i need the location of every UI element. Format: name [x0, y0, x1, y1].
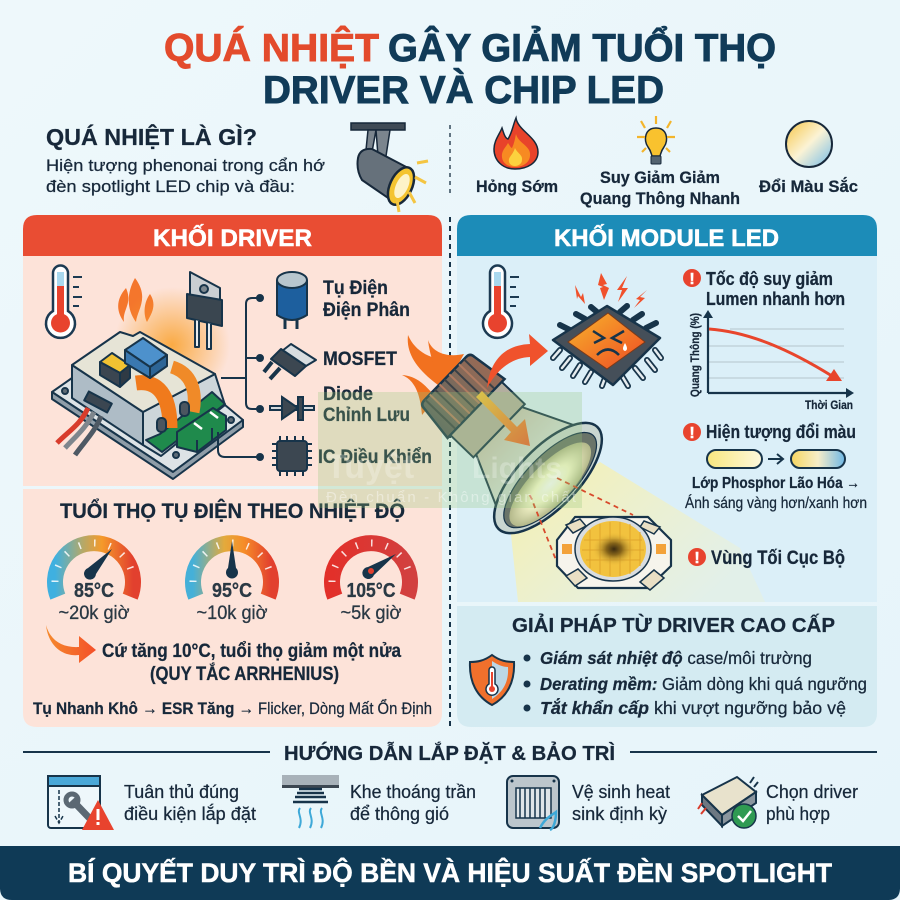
component labels: Chỉnh Lưu: [323, 405, 410, 426]
icon: installation manual: [48, 776, 114, 830]
text: lumen decline: Tốc độ suy giảm: [706, 269, 833, 289]
icon: diode: [270, 397, 314, 420]
footer banner: [0, 846, 900, 900]
watermark: Lights: [472, 452, 562, 485]
text: failure chain: [33, 699, 432, 718]
solution bullets: Derating mềm: Giảm dòng khi quá ngưỡng: [540, 674, 867, 694]
text: clean heat sink: sink định kỳ: [572, 804, 667, 824]
icon: COB LED chip with dark spot: [557, 517, 671, 590]
flames behind lamp: [402, 335, 464, 415]
text: colour shift: Lớp Phosphor Lão Hóa →: [692, 475, 860, 492]
text: lumen decline: !: [689, 271, 695, 288]
watermark: Đèn chuẩn - Không gian chất: [326, 489, 577, 506]
icon: TO-220 transistor: [187, 272, 222, 349]
LED module header: KHỐI MODULE LED: [554, 224, 779, 252]
component labels: MOSFET: [323, 349, 397, 370]
title: QUÁ NHIỆT: [164, 26, 379, 70]
gauge 85C: 85°C: [74, 580, 114, 602]
intro text: what is overheating: [46, 123, 325, 196]
gauge 95C: 95°C: [212, 580, 252, 602]
text: install conditions: điều kiện lắp đặt: [124, 803, 256, 824]
chart: lumen over time: [688, 310, 854, 412]
icon: heat sink cleaning: [507, 776, 559, 830]
gauge 105C: 105°C: [346, 580, 396, 602]
icon: colour shift circle: [786, 121, 832, 167]
text: local dark zone: Vùng Tối Cục Bộ: [711, 548, 845, 569]
text: Arrhenius rule: [102, 641, 401, 685]
icon: thermometer LED module: [483, 266, 519, 338]
arrow: rule: [46, 625, 96, 663]
icon: heat flames: [118, 278, 153, 322]
icon: track spotlight: [351, 123, 428, 212]
component labels: Diode: [323, 384, 373, 405]
label: early failure: Hỏng Sớm: [476, 177, 558, 196]
component labels: Tụ Điện: [323, 278, 388, 299]
text: ceiling ventilation: Khe thoáng trần: [350, 782, 476, 802]
heading: installation guide: HƯỚNG DẪN LẮP ĐẶT & BẢO TRÌ: [284, 741, 615, 765]
watermark: Tuyệt: [326, 448, 414, 486]
icon: ceiling vent: [282, 775, 339, 828]
title: GÂY GIẢM TUỔI THỌ: [388, 25, 776, 70]
component labels: [318, 278, 432, 468]
intro text: what is overheating: đèn spotlight LED chip và đầu:: [46, 177, 295, 196]
title: DRIVER VÀ CHIP LED: [263, 68, 664, 112]
illustration: LED spotlight: [396, 328, 619, 550]
text: install conditions: Tuân thủ đúng: [124, 782, 239, 802]
heat glow: [114, 287, 230, 403]
panel: LED module block: [457, 215, 877, 602]
gauge 95C: [193, 541, 271, 624]
connector lines: [218, 295, 263, 460]
text: Arrhenius rule: (QUY TẮC ARRHENIUS): [150, 663, 339, 685]
icon: SMD MOSFET: [264, 344, 316, 379]
text: colour shift: Ánh sáng vàng hơn/xanh hơn: [685, 495, 867, 512]
icon: shield thermometer: [470, 655, 514, 705]
text: colour shift: [683, 422, 867, 512]
icon: thermometer driver: [46, 266, 82, 338]
gauge 95C: ~10k giờ: [196, 603, 268, 624]
icon: light bulb: [637, 116, 675, 164]
driver header: KHỐI DRIVER: [153, 224, 312, 252]
label: lumen decline: Suy Giảm Giảm: [600, 168, 720, 187]
gauge 85C: ~20k giờ: [58, 603, 130, 624]
text: choose driver: Chọn driver: [766, 782, 858, 802]
text: colour shift: Hiện tượng đổi màu: [706, 422, 856, 442]
gauge 105C: [332, 543, 410, 624]
panel: driver solutions: [457, 606, 877, 727]
panel: driver block: [23, 215, 442, 486]
component labels: IC Điều Khiển: [318, 447, 432, 468]
icon: controller IC: [272, 436, 312, 476]
text: colour shift: !: [689, 425, 695, 442]
icon: stressed LED chip: [553, 306, 661, 386]
text: ceiling ventilation: [350, 782, 476, 824]
text: lumen decline: [683, 269, 845, 309]
label: lumen decline: [580, 168, 740, 208]
label: colour shift: Đổi Màu Sắc: [759, 177, 858, 196]
footer banner: BÍ QUYẾT DUY TRÌ ĐỘ BỀN VÀ HIỆU SUẤT ĐÈN SPOTLIGHT: [68, 857, 832, 888]
arrow: heat to chip: [487, 334, 548, 388]
text: lumen decline: Lumen nhanh hơn: [706, 289, 845, 309]
text: failure chain: Flicker, Dòng Mất Ổn Định: [258, 699, 432, 718]
text: install conditions: [124, 782, 256, 824]
text: choose driver: [766, 782, 858, 824]
panel: capacitor lifetime: [23, 489, 442, 727]
icon: driver with check: [698, 777, 758, 828]
text: local dark zone: !: [694, 550, 700, 567]
solution bullets: Giám sát nhiệt độ case/môi trường: [540, 648, 812, 668]
arrow: heat into lamp: [476, 391, 530, 446]
chart: lumen over time: Thời Gian: [805, 398, 853, 412]
text: Arrhenius rule: Cứ tăng 10°C, tuổi thọ giảm một nửa: [102, 641, 401, 662]
title: [164, 25, 776, 112]
light beam: [510, 462, 765, 602]
capacitor lifetime heading: TUỔI THỌ TỤ ĐIỆN THEO NHIỆT ĐỘ: [60, 499, 405, 523]
chart: lumen over time: Quang Thông (%): [688, 313, 702, 397]
illustration: driver circuit box: [52, 332, 243, 479]
solution bullets: [524, 648, 867, 718]
solutions heading: GIẢI PHÁP TỪ DRIVER CAO CẤP: [512, 613, 835, 637]
text: clean heat sink: Vệ sinh heat: [572, 782, 670, 802]
solution bullets: Tắt khẩn cấp khi vượt ngưỡng bảo vệ: [540, 697, 846, 718]
red dashed callout lines: [530, 478, 633, 560]
gauge 85C: [55, 543, 133, 624]
icon: heat sparks: [575, 273, 647, 308]
text: clean heat sink: [572, 782, 670, 824]
label: lumen decline: Quang Thông Nhanh: [580, 189, 740, 208]
text: ceiling ventilation: để thông gió: [350, 804, 449, 824]
intro text: what is overheating: Hiện tượng phenonai trong cẩn hớ: [46, 156, 325, 175]
intro text: what is overheating: QUÁ NHIỆT LÀ GÌ?: [46, 123, 257, 150]
icon: electrolytic capacitor: [277, 272, 307, 329]
gauge 105C: ~5k giờ: [340, 603, 402, 624]
text: failure chain: Tụ Nhanh Khô → ESR Tăng →: [33, 699, 254, 718]
text: choose driver: phù hợp: [766, 804, 830, 824]
watermark: [318, 392, 582, 508]
component labels: Điện Phân: [323, 300, 410, 321]
icon: flame: [494, 118, 538, 169]
